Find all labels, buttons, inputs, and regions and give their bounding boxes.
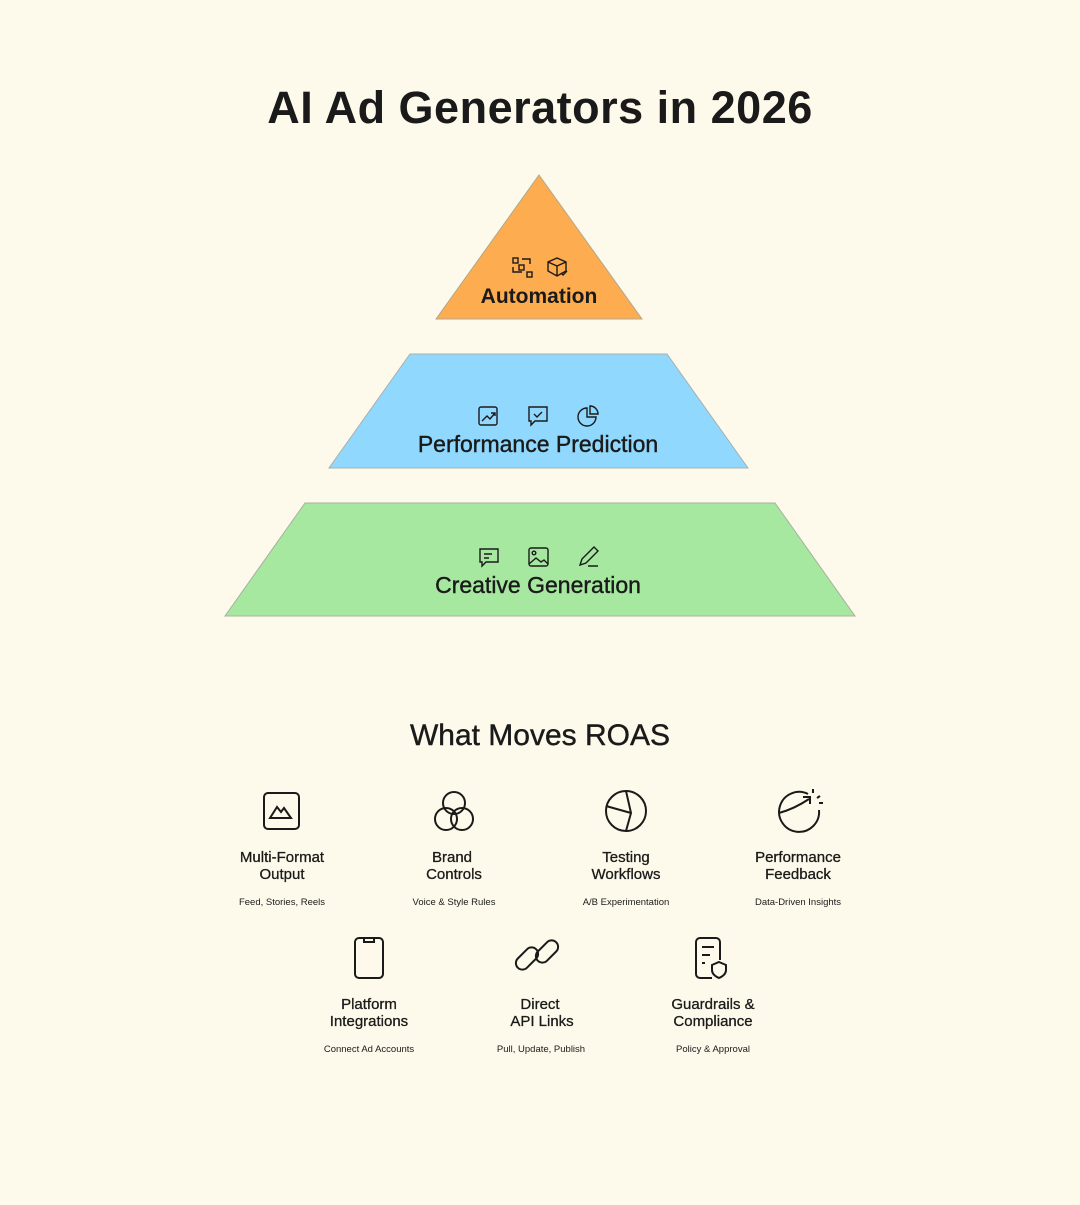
item: platform integrations: Connect Ad Accounts — [324, 1044, 414, 1055]
pyramid tier: performance prediction: Performance Prediction — [418, 431, 658, 457]
item: direct api links: Pull, Update, Publish — [497, 1044, 585, 1055]
title: AI Ad Generators in 2026 — [267, 82, 813, 133]
pyramid tier: automation — [436, 175, 642, 319]
item: performance feedback: Data-Driven Insights — [755, 897, 841, 908]
item: guardrails & compliance — [671, 938, 755, 1055]
icon: package check — [548, 258, 567, 276]
item: platform integrations: Platform — [341, 996, 397, 1013]
icon: chart — [479, 407, 497, 425]
item: brand controls: Brand — [432, 849, 472, 866]
item: guardrails & compliance: Policy & Approval — [676, 1044, 750, 1055]
icon: message check — [529, 407, 547, 425]
icon: pencil — [580, 547, 598, 566]
item: performance feedback: Feedback — [765, 866, 831, 883]
item: multi-format output: Feed, Stories, Reels — [239, 897, 325, 908]
heading: what moves roas: What Moves ROAS — [410, 719, 670, 752]
pyramid tier: automation: Automation — [481, 285, 597, 308]
item: brand controls: Controls — [426, 866, 482, 883]
item: direct api links: Direct — [520, 996, 560, 1013]
item: brand controls: Voice & Style Rules — [413, 897, 496, 908]
icon: pie — [578, 406, 598, 426]
icon: image — [529, 548, 548, 566]
item: testing workflows — [583, 791, 669, 908]
item: guardrails & compliance: Guardrails & — [671, 996, 755, 1013]
pyramid tier: performance prediction — [329, 354, 748, 468]
item: multi-format output — [239, 793, 325, 908]
icon: workflow — [513, 258, 532, 277]
item: testing workflows: Testing — [602, 849, 650, 866]
item: direct api links — [497, 938, 585, 1055]
icon: message — [480, 549, 498, 566]
item: platform integrations — [324, 938, 414, 1055]
item: multi-format output: Multi-Format — [240, 849, 325, 866]
item: guardrails & compliance: Compliance — [673, 1013, 753, 1030]
item: testing workflows: Workflows — [592, 866, 660, 883]
item: platform integrations: Integrations — [330, 1013, 408, 1030]
item: multi-format output: Output — [259, 866, 305, 883]
item: performance feedback — [755, 789, 841, 908]
item: brand controls — [413, 792, 496, 908]
pyramid tier: creative generation — [225, 503, 855, 616]
item: direct api links: API Links — [510, 1013, 574, 1030]
item: performance feedback: Performance — [755, 849, 841, 866]
pyramid tier: creative generation: Creative Generation — [435, 572, 641, 598]
item: testing workflows: A/B Experimentation — [583, 897, 669, 908]
